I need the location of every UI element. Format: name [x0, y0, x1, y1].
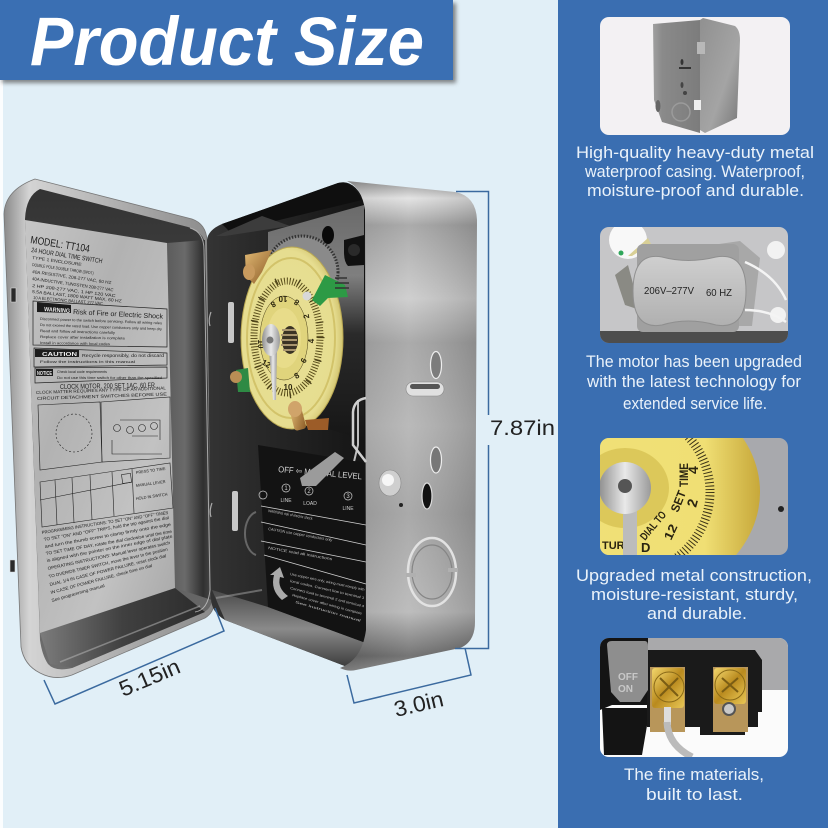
dimension: height 7.87in	[455, 192, 488, 648]
caption: motor: with the latest technology for	[586, 373, 802, 391]
card: dial close-up photo: D	[641, 540, 650, 555]
warning box: Install in accordance with local codes	[40, 341, 110, 346]
programming instructions: DUAL 1/4 IN CASE OF POWER FAILURE, reset clock dial	[49, 553, 167, 587]
warning rows on terminal panel	[261, 506, 366, 584]
dark hole	[422, 483, 432, 509]
wiring label plate: TYPE 1 ENCLOSURE	[32, 255, 82, 267]
dial key	[269, 350, 277, 400]
warning box: Disconnect power to the switch before servicing. Follow all wiring rules	[40, 317, 162, 325]
caption: casing	[576, 144, 814, 200]
dimension: width 5.15in	[44, 608, 224, 704]
front silver face	[340, 181, 477, 671]
caption: construction: and durable.	[647, 605, 747, 623]
caption: motor	[586, 353, 802, 413]
door outer rim	[4, 179, 214, 678]
programming instructions: TO OVERIDE TIMER SWITCH, move the lever to the position	[48, 547, 169, 579]
terminal markers: LINE	[342, 506, 354, 512]
dial numbers: 10	[278, 294, 287, 303]
dial numbers: 8	[293, 371, 301, 381]
interior hardware clips	[209, 302, 358, 555]
wiring label plate: MANUAL LEVER	[135, 479, 166, 488]
programming instructions: OPERATING INSTRUCTIONS: Manual lever operates switch	[47, 540, 171, 571]
middle oval hole	[430, 447, 442, 473]
label: 7.87in: 7.87in	[490, 417, 555, 440]
card: motor photo: 206V–277V	[644, 285, 694, 297]
card: dial close-up photo: TIME	[677, 463, 691, 487]
wiring terminal panel: WARNING risk of electric shock	[268, 509, 313, 521]
caution box: Recycle responsibly, do not discard	[82, 353, 165, 358]
programming instructions: TO SET TIME OF DAY, rotate the dial clockwise until the time	[45, 529, 173, 556]
card: dial close-up photo	[600, 438, 788, 555]
card: dial close-up photo: 4	[685, 466, 701, 474]
page background	[3, 0, 558, 828]
wiring label plate: MODEL: TT104	[30, 234, 91, 255]
warning box: Read and follow all instructions carefully	[40, 329, 115, 335]
card: motor photo: 60 HZ	[706, 287, 733, 299]
right blue panel	[558, 0, 828, 828]
product: enclosure body	[207, 181, 477, 671]
wiring label plate: PRESS TO TIME	[135, 466, 166, 475]
warning box: Replace cover after installation is complete	[40, 335, 125, 340]
dial numbers	[256, 294, 316, 392]
caption: construction: Upgraded metal construction,	[576, 567, 812, 585]
caption: materials	[624, 766, 764, 804]
card: dial close-up photo: 12	[661, 522, 681, 542]
caption: casing: High-quality heavy-duty metal	[576, 144, 814, 162]
terminal markers: LOAD	[303, 501, 317, 507]
dial numbers: 4	[307, 338, 316, 343]
notice box: Do not use this time switch for other than the specified	[57, 376, 162, 380]
notice box: Check local code requirements	[57, 370, 107, 374]
terminal markers: 1	[284, 486, 288, 492]
card: dial close-up photo: SET	[668, 488, 689, 514]
caution box: Follow the instructions in this manual	[40, 360, 135, 364]
warning box	[33, 301, 167, 347]
wiring terminal panel: OFF ⇦ MANUAL LEVEL	[278, 464, 363, 481]
header banner	[0, 0, 456, 83]
card: dial close-up photo: 2	[683, 497, 701, 509]
card: dial close-up photo: DIAL TO	[638, 509, 669, 543]
label: 5.15in: 5.15in	[115, 654, 184, 702]
wiring label plate: DOUBLE POLE DOUBLE THROW (DPDT)	[32, 262, 94, 276]
dimension: depth 3.0in	[347, 648, 471, 703]
caption: materials: built to last.	[646, 786, 743, 804]
caption: materials: The fine materials,	[624, 766, 764, 784]
caption: casing: moisture-proof and durable.	[587, 182, 804, 200]
wiring label plate: 5.5A BALLAST, 1800 WATT MAX, 60 HZ	[32, 289, 122, 303]
timer gear	[266, 236, 338, 308]
programming instructions	[41, 510, 173, 603]
enclosure interior	[207, 182, 367, 668]
programming instructions: IN CASE OF POWER FAILURE, check time on dial	[50, 563, 153, 595]
caption: construction: moisture-resistant, sturdy,	[591, 586, 798, 604]
wiring label plate: HOLD IN SWITCH	[135, 492, 168, 501]
timer dial	[241, 247, 343, 429]
programming instructions: and turn the thumb screw to clamp firmly onto the edge	[44, 522, 172, 549]
top oval hole	[430, 352, 442, 378]
door inner tray	[25, 189, 212, 669]
terminal markers: 3	[346, 494, 350, 500]
left margin strip	[0, 80, 3, 828]
dial numbers: 8	[269, 299, 277, 309]
wiring label plate: 10 A ELECTRONIC BALLAST, 277 VAC	[33, 295, 103, 306]
wiring label plate: 40A INDUCTIVE, TUNGSTEN 208-277 VAC	[32, 276, 114, 292]
caption: construction	[576, 567, 812, 623]
programming instructions: See programming manual	[51, 583, 105, 603]
programming instructions: TO SET "ON" AND "OFF" TRIPS, hold the trip against the dial	[43, 515, 169, 542]
wiring terminal panel: Use copper wire only, wiring must comply with	[290, 572, 365, 592]
wiring label plate: 40A RESISTIVE, 208-277 VAC, 60 HZ	[32, 269, 112, 285]
wiring label plate: 24 HOUR DIAL TIME SWITCH	[31, 247, 103, 265]
title: Product Size	[30, 3, 424, 80]
wiring label plate: CIRCUIT DETACHMENT SWITCHES BEFORE USE	[37, 391, 167, 401]
terminal markers: LINE	[280, 498, 292, 504]
terminal markers: 2	[307, 489, 311, 495]
dial spring	[281, 326, 298, 354]
terminal markers	[259, 484, 354, 512]
wiring label plate: 2 HP 208-277 VAC, 1 HP 120 VAC	[32, 283, 116, 298]
warning box: WARNING	[44, 307, 71, 315]
card: motor photo	[600, 221, 788, 343]
card: terminal photo: ON	[618, 684, 633, 695]
caption: casing: waterproof casing. Waterproof,	[584, 163, 805, 181]
terminal table	[40, 463, 173, 527]
programming instructions: is aligned with the pointer on the inner edge of dial plate	[46, 534, 173, 563]
product: open door with wiring label	[4, 179, 214, 678]
wiring terminal panel: See instruction manual	[295, 600, 362, 623]
manual lever	[300, 452, 344, 486]
knockout ring	[406, 538, 458, 606]
dial numbers: 10	[256, 340, 265, 349]
card: dial close-up photo: TUR	[602, 540, 625, 552]
dial numbers: 6	[299, 356, 309, 365]
dial numbers: 2	[302, 313, 311, 319]
warning box: Risk of Fire or Electric Shock	[73, 309, 164, 321]
card: casing photo	[600, 17, 790, 135]
dial numbers: 10	[284, 383, 293, 392]
notice box	[35, 367, 167, 383]
wiring label plate: CLOCK MOTOR, 200 SET 1AC, 60 FR	[60, 382, 155, 391]
curved arrow	[270, 567, 288, 600]
wiring terminal panel: local codes. Connect line to terminal 1	[290, 579, 365, 600]
wiring diagrams	[38, 397, 170, 470]
caption: motor: extended service life.	[623, 395, 767, 413]
wiring terminal panel: CAUTION use copper conductors only	[268, 527, 333, 542]
card: terminal photo: OFF	[618, 672, 638, 683]
wiring terminal panel: Replace cover after wiring is complete	[292, 593, 362, 616]
wiring terminal panel	[258, 445, 366, 643]
interior floor	[212, 590, 366, 668]
screw	[379, 470, 401, 496]
mounting back plate	[268, 205, 364, 440]
caption: motor: The motor has been upgraded	[586, 353, 802, 371]
dial numbers: 12	[260, 358, 273, 370]
notice box: NOTICE	[37, 371, 53, 377]
programming instructions: PROGRAMMING INSTRUCTIONS: TO SET "ON" AND "OFF" TIMES	[41, 510, 169, 535]
wiring terminal panel: NOTICE read all instructions	[268, 546, 333, 561]
horizontal slot	[406, 382, 444, 396]
wiring terminal panel: Connect load to terminal 2 and terminal 4	[290, 586, 365, 608]
wiring label plate	[25, 220, 175, 633]
brass and green trippers	[230, 250, 349, 431]
warning box: Do not exceed the rated load. Use copper conductors only and keep dry	[40, 323, 162, 331]
caution box: CAUTION	[42, 352, 77, 358]
card: terminal photo	[600, 638, 788, 757]
wiring label plate: CLOCK MATTER REQUIRES ANY TYPE OF AN ADDITIONAL	[36, 385, 167, 395]
door latch tabs	[10, 288, 16, 572]
label: 3.0in: 3.0in	[392, 686, 446, 722]
dial numbers: 8	[292, 297, 301, 307]
caution box	[34, 348, 167, 367]
